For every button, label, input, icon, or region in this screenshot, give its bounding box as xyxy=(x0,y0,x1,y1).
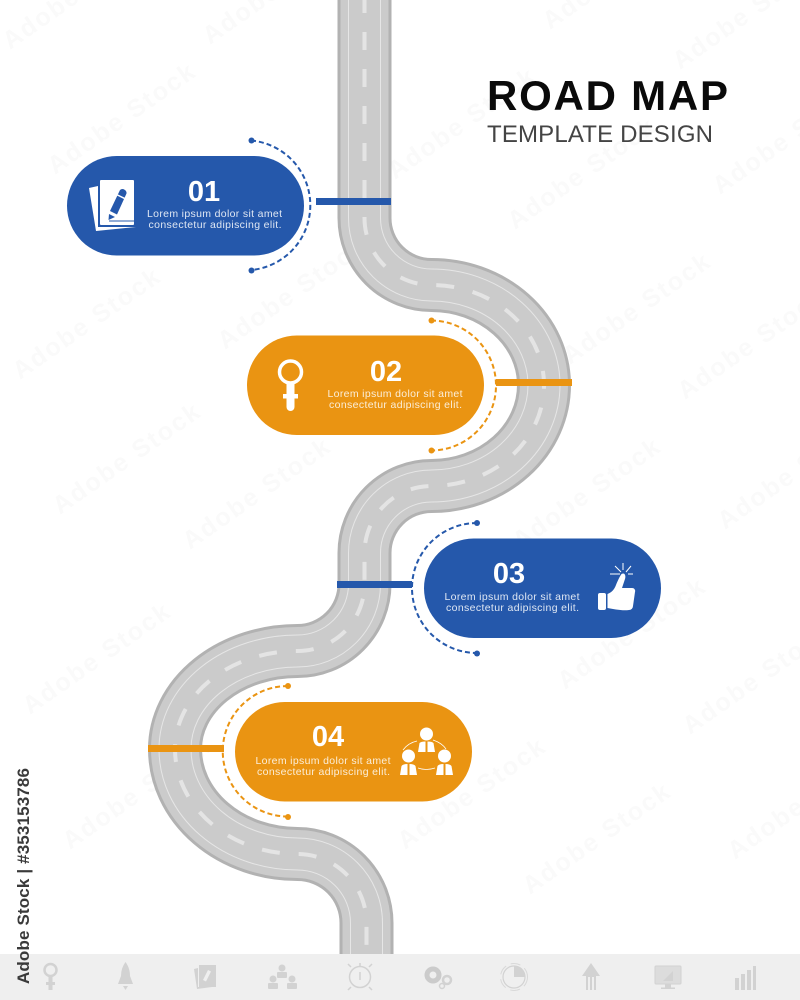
winding road xyxy=(175,0,544,954)
dashed arc 03 xyxy=(412,520,480,656)
icon: gears xyxy=(427,969,451,988)
step 04 panel xyxy=(148,683,472,820)
number 04: 04 xyxy=(312,721,344,753)
icon: key xyxy=(44,964,56,990)
description 04: Lorem ipsum dolor sit amet xyxy=(256,755,391,767)
icon: magnifier key xyxy=(280,361,302,411)
watermark pattern: Adobe Stock xyxy=(177,432,337,555)
description 01: consectetur adipiscing elit. xyxy=(148,219,282,231)
icon: stopwatch xyxy=(348,963,372,990)
dashed arc 02 xyxy=(428,318,496,454)
bottom icon band xyxy=(0,954,800,1000)
number 01: 01 xyxy=(188,176,220,208)
icon: paper and pencil xyxy=(89,180,136,231)
number 02: 02 xyxy=(370,356,402,388)
connector 01 xyxy=(316,198,391,205)
watermark pattern: Adobe Stock xyxy=(507,432,667,555)
icon: monitor xyxy=(655,966,681,989)
stock credit: Adobe Stock | #353153786 xyxy=(14,768,33,984)
icon: team xyxy=(268,964,297,989)
watermark pattern: Adobe Stock xyxy=(382,62,542,185)
icon: pie chart xyxy=(500,964,528,990)
description 04 xyxy=(256,755,391,778)
watermark pattern: Adobe Stock xyxy=(552,572,712,695)
description 02 xyxy=(328,388,463,411)
connector 04 xyxy=(148,745,224,752)
icon: documents xyxy=(194,965,216,989)
title xyxy=(487,72,728,148)
step 01 panel xyxy=(67,138,391,274)
watermark pattern: Adobe Stock xyxy=(47,397,207,520)
icon: upward arrow xyxy=(582,963,600,990)
dashed arc 01 xyxy=(248,138,310,274)
watermark pattern: Adobe Stock xyxy=(502,112,662,235)
icon: bar chart xyxy=(735,966,756,990)
watermark pattern: Adobe Stock xyxy=(7,262,167,385)
description 04: consectetur adipiscing elit. xyxy=(257,766,390,778)
description 02: consectetur adipiscing elit. xyxy=(329,399,462,411)
watermark pattern: Adobe Stock xyxy=(42,57,202,180)
title: TEMPLATE DESIGN xyxy=(487,121,713,148)
icon: team cycle xyxy=(400,728,453,775)
description 03 xyxy=(444,591,580,614)
watermark pattern: Adobe Stock xyxy=(392,732,552,855)
connector 03 xyxy=(337,581,412,588)
description 01: Lorem ipsum dolor sit amet xyxy=(147,208,282,220)
dashed arc 04 xyxy=(223,683,291,820)
step 03 panel xyxy=(337,520,661,656)
icon: rocket xyxy=(118,962,133,990)
description 03: consectetur adipiscing elit. xyxy=(446,602,579,614)
watermark pattern: Adobe Stock xyxy=(517,777,677,900)
description 03: Lorem ipsum dolor sit amet xyxy=(444,591,580,603)
watermark pattern: Adobe Stock xyxy=(212,232,372,355)
description 02: Lorem ipsum dolor sit amet xyxy=(328,388,463,400)
title: ROAD MAP xyxy=(487,72,728,119)
watermark pattern: Adobe Stock xyxy=(57,732,217,855)
step 02 panel xyxy=(247,318,572,454)
number 03: 03 xyxy=(493,558,525,590)
connector 02 xyxy=(496,379,572,386)
watermark pattern: Adobe Stock xyxy=(17,597,177,720)
watermark pattern: Adobe Stock xyxy=(557,247,717,370)
description 01 xyxy=(147,208,282,231)
icon: thumbs up xyxy=(598,563,635,610)
